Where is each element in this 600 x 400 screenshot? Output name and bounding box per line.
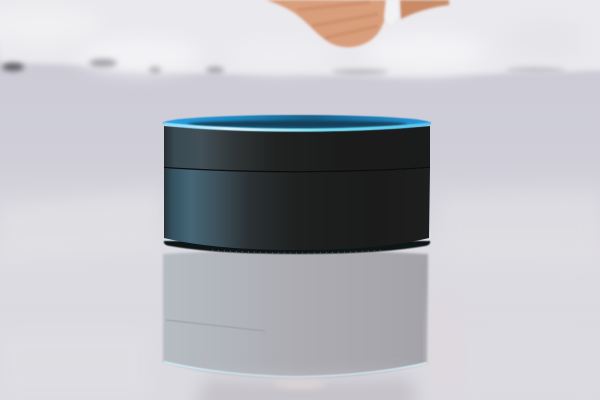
speaker lower body [164,168,430,250]
bedding shadows [2,59,565,74]
blurred white bedding [0,0,600,77]
reflected seam line [166,320,265,331]
speaker upper body [164,126,430,172]
blurred hand [266,0,449,47]
speaker base with grille [164,241,430,254]
blue light ring [163,115,431,131]
table edge glow [0,190,600,400]
speaker [163,115,431,254]
reflected light ring [164,362,427,377]
speaker reflection [163,250,455,400]
seam between body sections [164,168,430,172]
reflected base shadow below ring [195,376,420,400]
